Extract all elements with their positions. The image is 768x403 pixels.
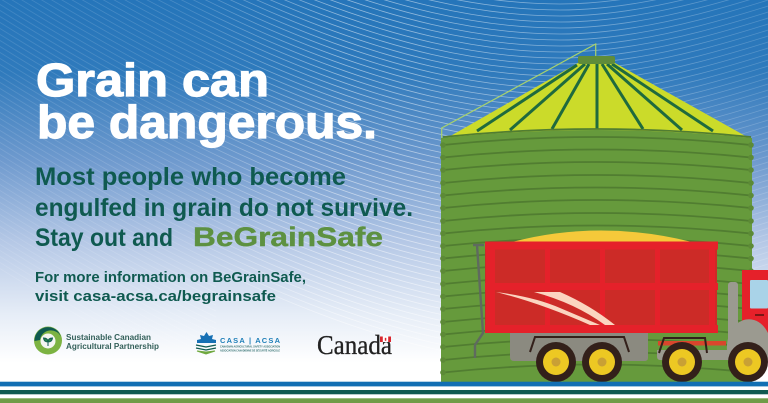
- chute: [473, 245, 484, 358]
- subheading text: engulfed in grain do not survive.: [35, 194, 413, 222]
- trailer box: [485, 242, 718, 333]
- logo: CASA ACSA: [196, 332, 281, 354]
- title: be dangerous.: [37, 96, 377, 148]
- logo: Canada wordmark: Canada: [317, 330, 392, 360]
- grain load: [512, 230, 692, 242]
- wheels: [536, 342, 768, 382]
- logo: CASA ACSA: ASSOCIATION CANADIENNE DE SÉCURITÉ AGRICOLE: [220, 348, 280, 352]
- logo: Sustainable Canadian Agricultural Partnership: Agricultural Partnership: [66, 342, 159, 351]
- logo: Sustainable Canadian Agricultural Partnership: Sustainable Canadian: [66, 333, 151, 342]
- silo: [440, 44, 754, 382]
- more information text: [35, 269, 306, 305]
- subheading text: [35, 163, 413, 252]
- footer stripes: [0, 382, 768, 403]
- chassis: [510, 282, 738, 361]
- logo: CASA ACSA: CASA | ACSA: [220, 336, 281, 345]
- truck cab: [727, 270, 768, 362]
- logo: Sustainable Canadian Agricultural Partnership: [34, 326, 159, 354]
- silo roof: [442, 44, 749, 138]
- subheading text: Stay out and: [35, 224, 173, 252]
- more information text: visit casa-acsa.ca/begrainsafe: [35, 288, 276, 305]
- grain truck: [473, 230, 768, 382]
- logo: CASA ACSA: CANADIAN AGRICULTURAL SAFETY ASSOCIATION: [220, 344, 280, 348]
- subheading text: Most people who become: [35, 163, 346, 191]
- title: Grain can: [36, 54, 269, 106]
- title: [36, 54, 377, 148]
- silo body: [440, 129, 754, 382]
- more information text: For more information on BeGrainSafe,: [35, 269, 306, 286]
- subheading text: BeGrainSafe: [193, 222, 383, 252]
